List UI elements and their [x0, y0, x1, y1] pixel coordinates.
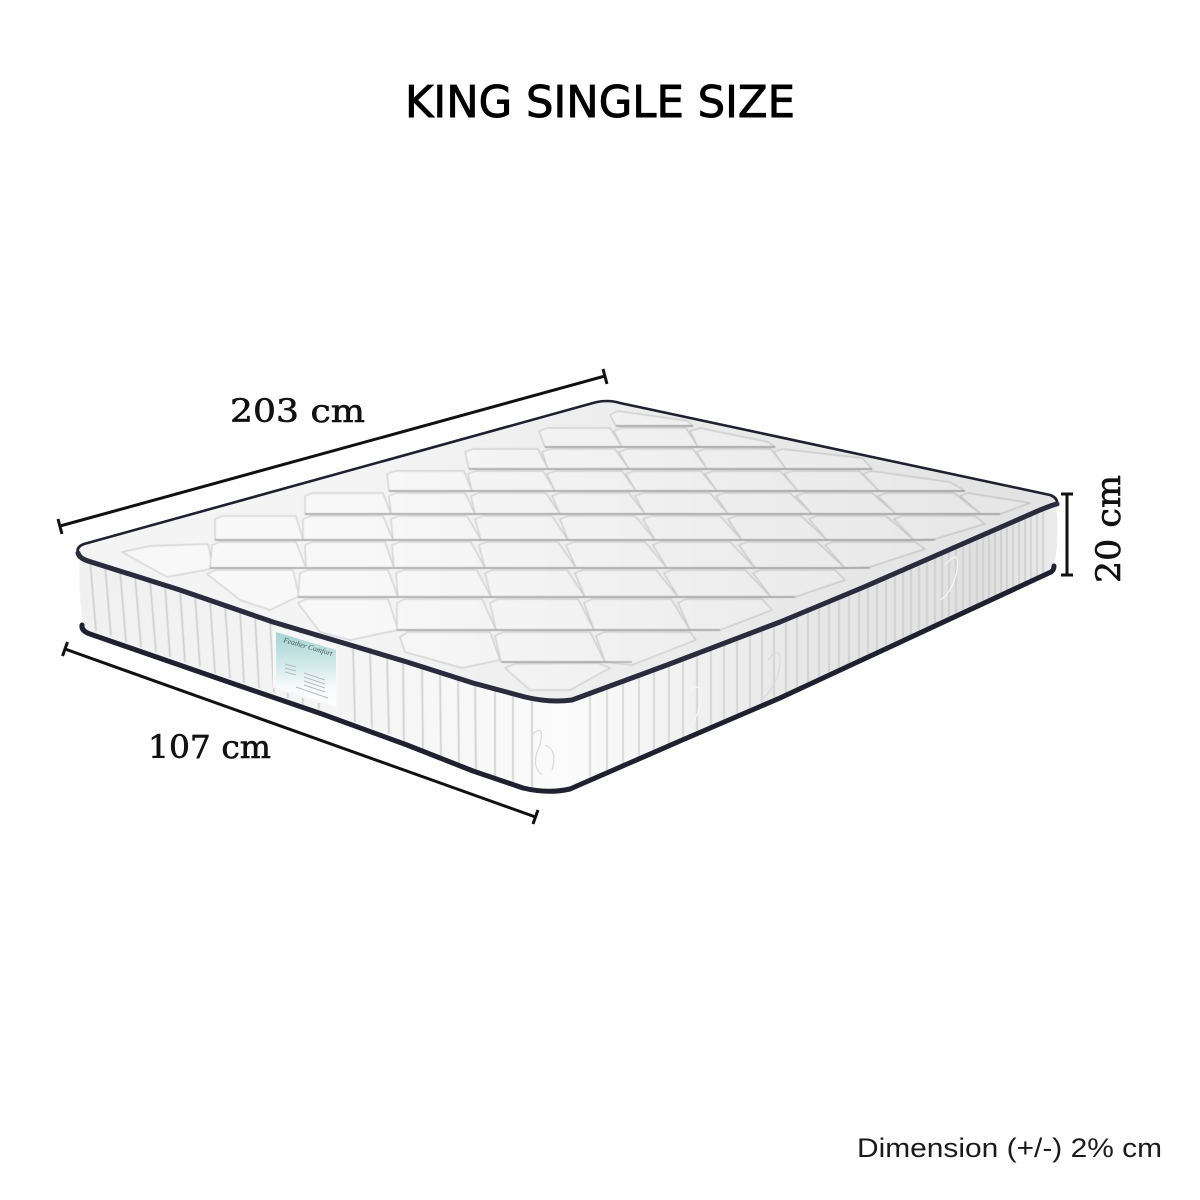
- side stripes: short side: [590, 509, 1043, 778]
- product label card: [273, 626, 338, 709]
- label brand name: Feather Comfort: [281, 635, 334, 658]
- side stripes: long side: [90, 560, 532, 787]
- top surface shading: [78, 401, 1057, 701]
- quilted cells: [122, 411, 1030, 690]
- dimension label: 20 cm: 20 cm: [1089, 475, 1129, 583]
- mattress top surface: [78, 401, 1057, 701]
- fabric floral watermarks: [532, 557, 958, 775]
- mattress side faces: [79, 503, 1058, 791]
- piping: back edges: [78, 401, 1057, 553]
- piping: front top edge: [78, 504, 1057, 701]
- tolerance note: Dimension (+/-) 2% cm: [857, 1133, 1162, 1163]
- mattress: [78, 401, 1058, 791]
- quilting row seams: [210, 426, 1000, 662]
- dimension label: 107 cm: 107 cm: [148, 728, 271, 766]
- dimension line: 203 cm: [58, 369, 607, 534]
- title: KING SINGLE SIZE: [405, 77, 795, 128]
- label fine print: [285, 664, 328, 698]
- dimension label: 203 cm: 203 cm: [230, 392, 365, 430]
- dimension line: 107 cm: [62, 642, 538, 824]
- dimension line: 20 cm: [1061, 494, 1073, 575]
- piping: bottom edge: [82, 566, 1054, 791]
